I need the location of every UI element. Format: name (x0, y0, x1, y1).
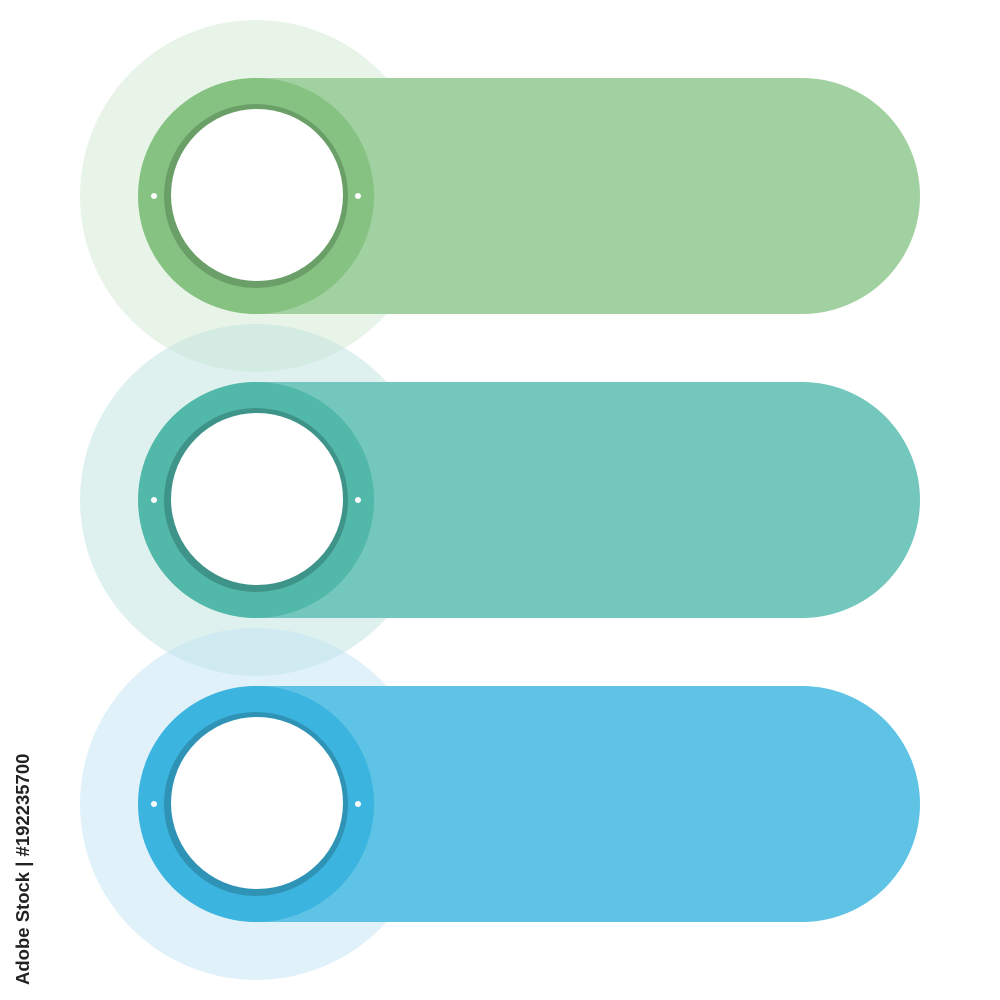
halo circles (80, 20, 432, 980)
icon: ring 2 (138, 382, 374, 618)
icon: ring 3 (138, 686, 374, 922)
panel: bar 2 (138, 382, 920, 618)
icon: ring 1 (138, 78, 374, 314)
panel: bar 1 (138, 78, 920, 314)
panel: bar 3 (138, 686, 920, 922)
watermark id: Adobe Stock | #192235700 (12, 754, 33, 985)
